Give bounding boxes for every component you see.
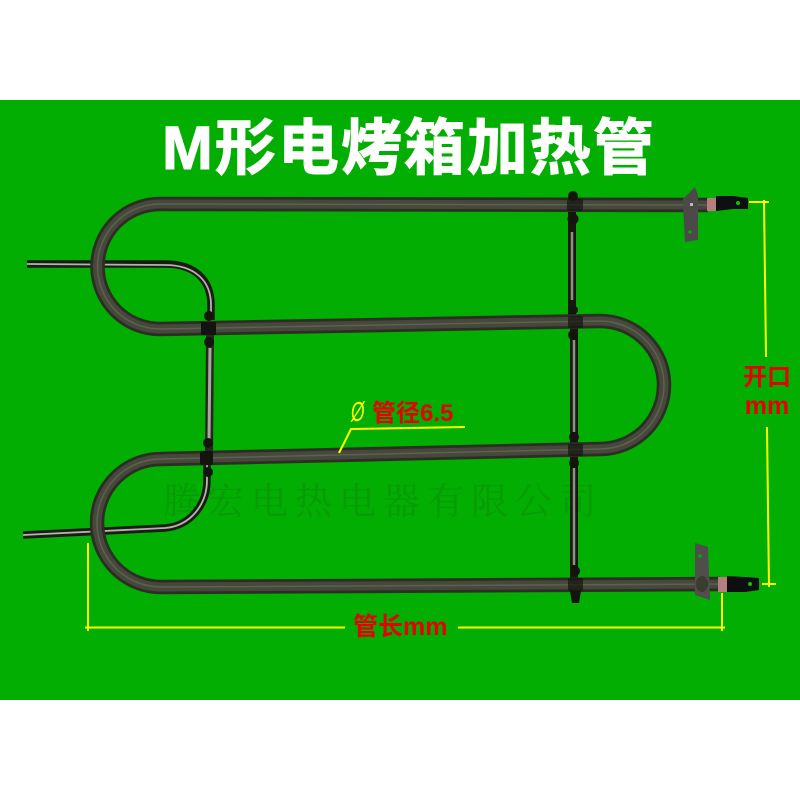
heating tube assembly [23,204,720,587]
diameter symbol: Ø [350,396,366,427]
opening dimension line [749,200,776,587]
left inner leads [23,264,211,535]
top terminal [683,187,748,242]
diameter label: 管径6.5 [372,400,453,427]
length dimension line [85,543,725,631]
length dimension label: 管长mm [353,613,447,641]
opening dimension label: mm [745,392,789,420]
bottom terminal [695,543,759,600]
opening dimension label [743,364,791,420]
opening dimension label: 开口 [743,364,791,391]
green background panel [0,100,800,700]
watermark: 腾宏电热电器有限公司 [163,471,603,525]
cross bar supports [209,210,574,585]
title: M形电烤箱加热管 [162,114,656,182]
diameter leader line [339,427,465,453]
tube clamps [200,191,583,603]
main M-shaped tube [97,204,720,587]
